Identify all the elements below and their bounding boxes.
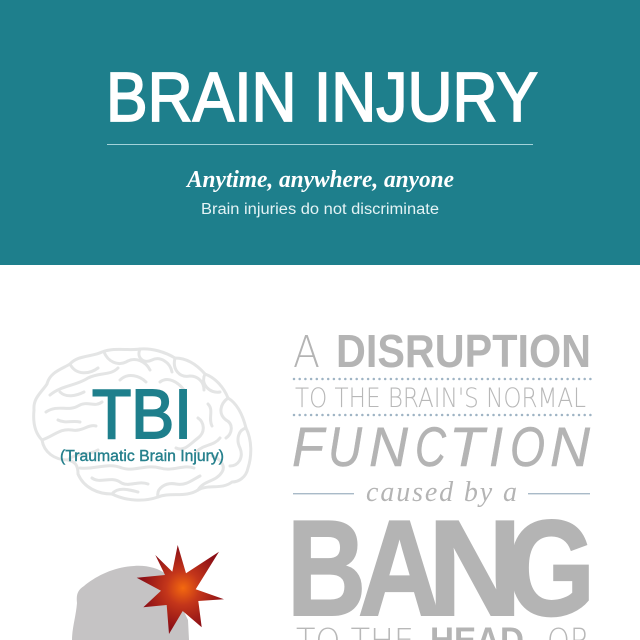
word: FUNCTION: U <box>328 415 362 478</box>
panel: typographic definition <box>287 325 595 640</box>
word: BANG: G <box>507 492 595 640</box>
icon: brain outline with TBI label <box>34 349 251 500</box>
word: BANG: A <box>358 492 441 640</box>
panel: header banner <box>0 0 640 265</box>
word: FUNCTION: T <box>449 415 488 478</box>
word: BANG: B <box>287 492 366 640</box>
word: FUNCTION <box>292 415 591 478</box>
rule left <box>293 493 354 494</box>
word: FUNCTION: N <box>550 415 591 478</box>
word: FUNCTION: C <box>415 415 446 478</box>
dotted divider bottom <box>294 414 592 416</box>
brain outline <box>34 349 251 500</box>
TBI label: TBI <box>92 375 192 453</box>
word: FUNCTION: N <box>369 415 409 478</box>
word: A: A <box>293 327 320 378</box>
subtitle: Brain injuries do not discriminate <box>201 201 439 218</box>
tagline: Anytime, anywhere, anyone <box>185 167 454 193</box>
line: to the head or <box>296 621 590 640</box>
word: BANG: N <box>428 492 522 640</box>
word: FUNCTION: F <box>292 415 327 478</box>
line: to the brain's normal: TO THE BRAIN'S NORMAL <box>295 383 586 414</box>
word: FUNCTION: O <box>510 415 545 478</box>
head silhouette <box>72 566 189 640</box>
title: BRAIN INJURY <box>106 58 538 136</box>
word: DISRUPTION: DISRUPTION <box>336 325 591 377</box>
impact burst <box>137 545 224 634</box>
word: FUNCTION: I <box>489 415 503 478</box>
rule right <box>528 493 590 494</box>
icon: head silhouette with impact burst <box>72 545 224 640</box>
TBI full name: (Traumatic Brain Injury) <box>60 448 224 465</box>
word: BANG <box>287 492 595 640</box>
text: caused by a: caused by a <box>366 477 517 508</box>
dotted divider top <box>294 378 592 380</box>
